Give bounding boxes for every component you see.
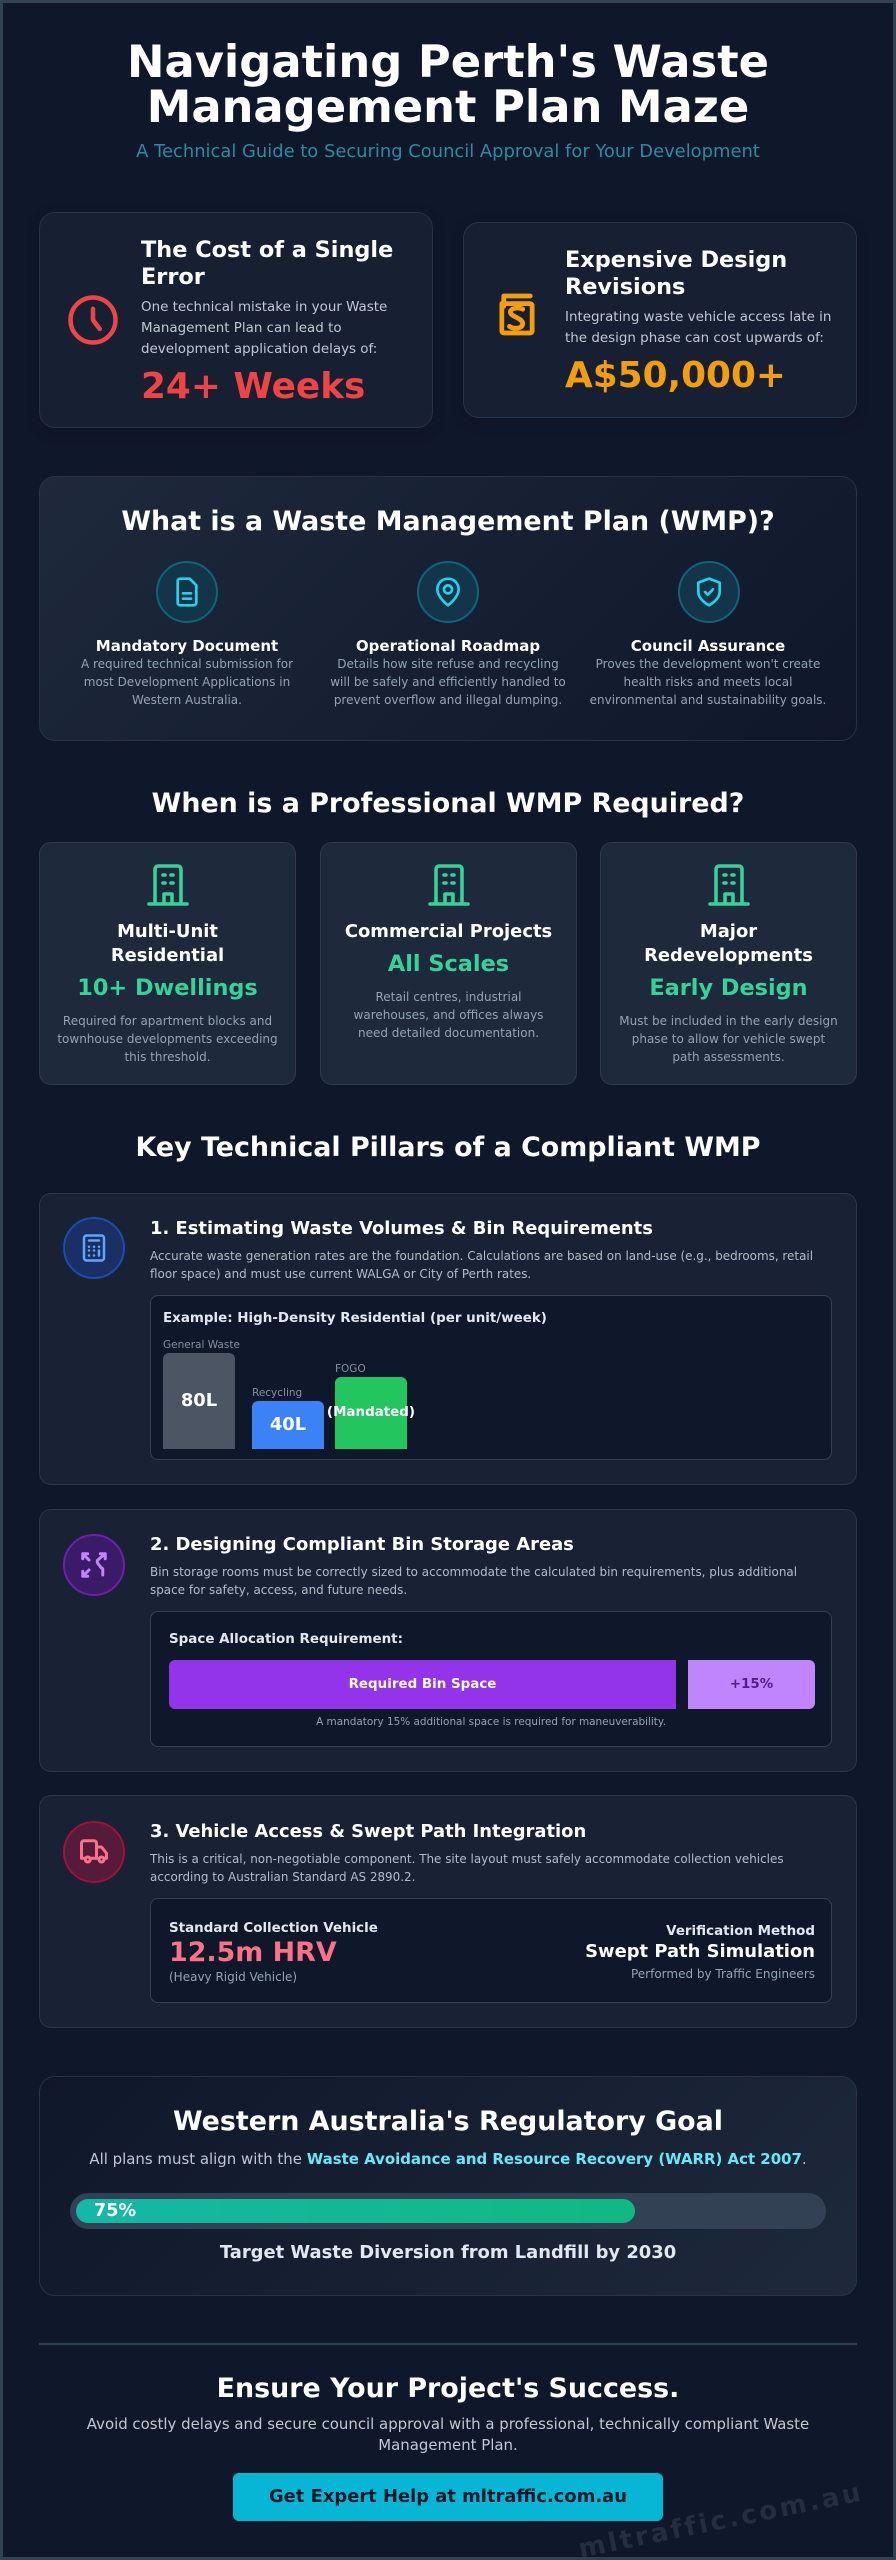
panel: commercial projects: [320, 842, 577, 1085]
panel: design revisions: [463, 222, 857, 418]
box: vehicle and verification: [150, 1898, 832, 2003]
icon: truck: [63, 1821, 125, 1883]
heading: regulatory goal: Western Australia's Regulatory Goal: [173, 2106, 723, 2137]
bar: recycling: Recycling: [252, 1387, 302, 1399]
panel: pillar 3: [39, 1795, 857, 2028]
icon: building: [147, 864, 189, 906]
item: operational roadmap: prevent overflow and illegal dumping.: [334, 693, 562, 707]
value: Early Design: [649, 975, 808, 1001]
diagram: space allocation: [150, 1611, 832, 1747]
bar: FOGO: (Mandated): [327, 1405, 415, 1420]
heading: [565, 247, 787, 300]
item: council assurance: [590, 637, 826, 707]
heading: when required: When is a Professional WMP Required?: [152, 788, 744, 819]
label: [644, 921, 813, 966]
button: expert help: Get Expert Help at mltraffic.com.au: [269, 2486, 627, 2507]
description: [565, 310, 831, 346]
label: Major: [700, 921, 757, 942]
title: Navigating Perth's Waste: [127, 35, 769, 88]
item: mandatory document: most Development Applications in: [84, 675, 290, 689]
pillar 3 description: according to Australian Standard AS 2890.2.: [150, 1870, 415, 1884]
button: expert help: [233, 2473, 663, 2521]
heading: The Cost of a Single: [141, 237, 393, 263]
bar: general waste: General Waste: [163, 1339, 240, 1351]
heading: key technical pillars: Key Technical Pillars of a Compliant WMP: [136, 1132, 760, 1163]
description: townhouse developments exceeding: [57, 1032, 278, 1046]
note: A mandatory 15% additional space is required for maneuverability.: [316, 1716, 666, 1728]
description: Must be included in the early design: [619, 1014, 838, 1028]
description: Management Plan can lead to: [141, 321, 342, 336]
description: Required for apartment blocks and: [63, 1014, 272, 1028]
description: warehouses, and offices always: [354, 1008, 543, 1022]
progress bar: 75%: [70, 2193, 826, 2229]
verification method: Swept Path Simulation: [585, 1941, 815, 1962]
pillar 2 title: 2. Designing Compliant Bin Storage Areas: [150, 1534, 574, 1555]
description: Integrating waste vehicle access late in: [565, 310, 831, 325]
panel: pillar 2: [39, 1509, 857, 1772]
collection vehicle: Standard Collection Vehicle: [169, 1921, 378, 1936]
icon: dollar document: [499, 294, 535, 336]
description: path assessments.: [672, 1050, 785, 1064]
call to action text: Management Plan.: [378, 2436, 518, 2454]
item: operational roadmap: will be safely and efficiently handled to: [330, 675, 566, 689]
description: [57, 1014, 278, 1064]
icon: shield check: [678, 561, 740, 623]
bar: required bin space: [169, 1660, 676, 1709]
icon: document: [156, 561, 218, 623]
subtitle: A Technical Guide to Securing Council Approval for Your Development: [136, 141, 760, 162]
value: 10+ Dwellings: [77, 975, 258, 1001]
heading: Revisions: [565, 274, 685, 300]
description: phase to allow for vehicle swept: [632, 1032, 825, 1046]
stat: A$50,000+: A$50,000+: [565, 355, 786, 396]
panel: major redevelopments: [600, 842, 857, 1085]
description: need detailed documentation.: [358, 1026, 539, 1040]
item: operational roadmap: Operational Roadmap: [356, 637, 540, 655]
collection vehicle: [169, 1921, 378, 1984]
icon: building: [708, 864, 750, 906]
item: council assurance: environmental and sustainability goals.: [590, 693, 826, 707]
pillar 3 title: 3. Vehicle Access & Swept Path Integration: [150, 1821, 586, 1842]
pillar 2 description: space for safety, access, and future needs.: [150, 1583, 407, 1597]
pillar 1 description: Accurate waste generation rates are the foundation. Calculations are based on land-use (e.g., bedrooms, retail: [150, 1249, 813, 1263]
label: Multi-Unit: [117, 921, 218, 942]
progress fill: 75%: [94, 2201, 136, 2221]
collection vehicle: (Heavy Rigid Vehicle): [169, 1970, 297, 1984]
regulatory text: All plans must align with the Waste Avoidance and Resource Recovery (WARR) Act 2007.: [89, 2150, 807, 2168]
chart title: Example: High-Density Residential (per unit/week): [163, 1311, 547, 1326]
progress fill: [76, 2199, 635, 2223]
verification method: Verification Method: [666, 1924, 815, 1939]
pillar 1 description: floor space) and must use current WALGA or City of Perth rates.: [150, 1267, 531, 1281]
panel: multi-unit residential: [39, 842, 296, 1085]
call to action text: Avoid costly delays and secure council approval with a professional, technically compliant Waste: [87, 2415, 809, 2433]
description: [619, 1014, 838, 1064]
icon: clock: [68, 295, 118, 345]
bar: +15%: [688, 1660, 815, 1709]
pillar 1 title: 1. Estimating Waste Volumes & Bin Requirements: [150, 1218, 653, 1239]
heading: what is a WMP: What is a Waste Management Plan (WMP)?: [121, 506, 775, 537]
item: council assurance: Proves the development won't create: [596, 657, 820, 671]
panel: cost of error: [39, 212, 433, 428]
progress caption: Target Waste Diversion from Landfill by 2030: [220, 2242, 676, 2263]
heading: Error: [141, 264, 205, 290]
panel: regulatory goal: [39, 2076, 857, 2296]
title: Management Plan Maze: [147, 80, 749, 133]
bar: required bin space: Required Bin Space: [349, 1677, 496, 1692]
description: One technical mistake in your Waste: [141, 300, 387, 315]
item: mandatory document: [81, 637, 294, 707]
bar: recycling: [252, 1387, 324, 1449]
item: operational roadmap: [330, 637, 566, 707]
pillar 3 description: This is a critical, non-negotiable component. The site layout must safely accommodate collection vehicles: [150, 1852, 784, 1866]
item: mandatory document: Mandatory Document: [96, 637, 278, 655]
bar: general waste: [163, 1339, 240, 1449]
pillar 3 description: [150, 1852, 784, 1884]
item: council assurance: health risks and meets local: [624, 675, 792, 689]
pillar 1 description: [150, 1249, 813, 1281]
label: Redevelopments: [644, 945, 813, 966]
collection vehicle: 12.5m HRV: [169, 1937, 337, 1968]
heading: Expensive Design: [565, 247, 787, 273]
bar: FOGO: [327, 1363, 415, 1449]
bar: +15%: +15%: [730, 1677, 773, 1692]
bar: FOGO: FOGO: [335, 1363, 366, 1375]
icon: calculator: [63, 1217, 125, 1279]
item: operational roadmap: Details how site refuse and recycling: [337, 657, 559, 671]
bar chart: example bins: [150, 1295, 832, 1460]
label: Commercial Projects: [345, 921, 552, 942]
description: Retail centres, industrial: [375, 990, 522, 1004]
description: [141, 300, 387, 357]
pillar 2 description: [150, 1565, 797, 1597]
description: development application delays of:: [141, 342, 377, 357]
icon: shuffle arrows: [63, 1534, 125, 1596]
call to action text: [86, 2415, 809, 2454]
label: Residential: [111, 945, 224, 966]
verification method: [585, 1924, 815, 1981]
title: [127, 35, 769, 133]
icon: building: [428, 864, 470, 906]
heading: [141, 237, 393, 290]
label: [111, 921, 224, 966]
item: council assurance: Council Assurance: [631, 637, 785, 655]
description: this threshold.: [124, 1050, 211, 1064]
description: [354, 990, 543, 1040]
pillar 2 description: Bin storage rooms must be correctly sized to accommodate the calculated bin requirements, plus additional: [150, 1565, 797, 1579]
item: mandatory document: Western Australia.: [132, 693, 242, 707]
divider: [39, 2343, 857, 2345]
verification method: Performed by Traffic Engineers: [631, 1967, 815, 1981]
icon: map pin: [417, 561, 479, 623]
panel: pillar 1: [39, 1193, 857, 1485]
bar: recycling: 40L: [270, 1414, 306, 1435]
value: All Scales: [388, 951, 509, 977]
description: the design phase can cost upwards of:: [565, 331, 824, 346]
stat: 24+ weeks: 24+ Weeks: [141, 366, 365, 407]
heading: ensure success: Ensure Your Project's Success.: [217, 2373, 679, 2404]
bar: general waste: 80L: [181, 1390, 217, 1411]
diagram label: Space Allocation Requirement:: [169, 1632, 403, 1647]
panel: what is a WMP: [39, 476, 857, 741]
item: mandatory document: A required technical submission for: [81, 657, 293, 671]
